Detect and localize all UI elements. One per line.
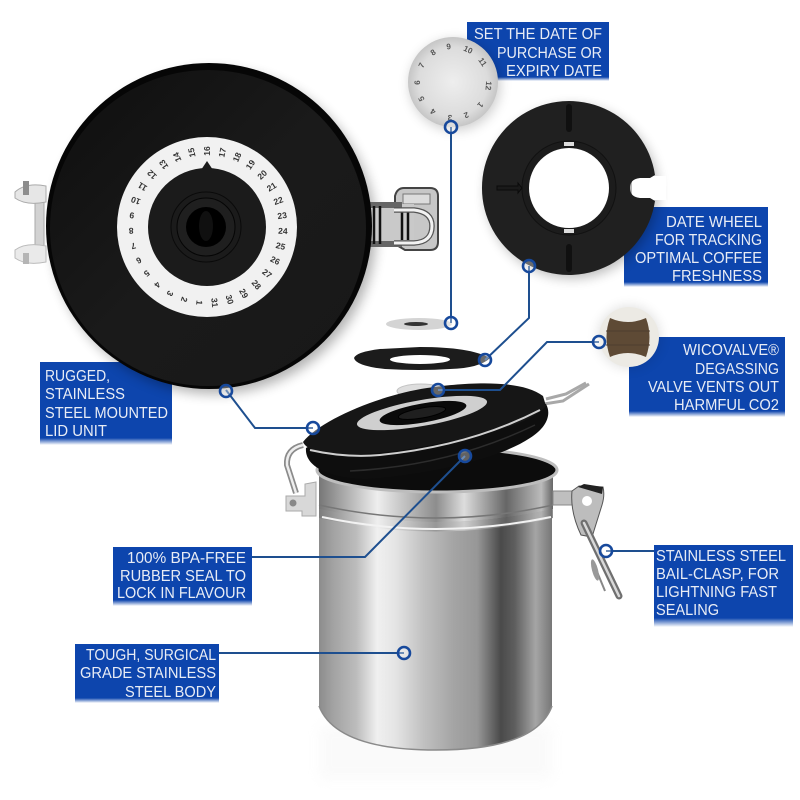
label: wicovalve: HARMFUL CO2 bbox=[674, 397, 779, 414]
exploded metal disc bbox=[386, 318, 452, 330]
metal date disc: 5 bbox=[416, 94, 427, 103]
ring dates: 13 bbox=[157, 158, 170, 171]
metal date disc: 2 bbox=[462, 110, 470, 120]
ring dates: 9 bbox=[129, 210, 135, 221]
canister reflection bbox=[319, 725, 552, 780]
ring dates: 11 bbox=[136, 180, 149, 193]
label: wicovalve: WICOVALVE® bbox=[683, 342, 779, 359]
lid top bbox=[303, 383, 546, 454]
label: set the date: SET THE DATE OF bbox=[474, 26, 602, 43]
ring dates: 27 bbox=[260, 267, 274, 280]
ring dates: 18 bbox=[230, 151, 244, 163]
label: bail clasp: LIGHTNING FAST bbox=[656, 584, 777, 601]
label: bail clasp: BAIL-CLASP, FOR bbox=[656, 566, 779, 583]
ring dates: 23 bbox=[277, 210, 288, 221]
label: rugged lid unit: STEEL MOUNTED bbox=[45, 405, 168, 422]
ring dates bbox=[128, 146, 288, 308]
white date ring bbox=[117, 137, 297, 317]
ring dates: 7 bbox=[130, 241, 137, 252]
icon: degassing valve bbox=[598, 306, 660, 368]
metal date disc: 1 bbox=[475, 100, 485, 110]
label: date wheel: OPTIMAL COFFEE bbox=[635, 250, 762, 267]
date wheel part bbox=[482, 101, 666, 275]
metal date disc: 12 bbox=[483, 81, 493, 91]
metal date disc: 8 bbox=[429, 47, 438, 58]
ring dates: 24 bbox=[278, 226, 288, 236]
label: date wheel bbox=[624, 207, 768, 287]
label: wicovalve: DEGASSING bbox=[695, 361, 779, 378]
ring dates: 1 bbox=[194, 300, 205, 306]
right lid handle bbox=[544, 383, 589, 404]
label: rubber seal: 100% BPA-FREE bbox=[127, 550, 246, 567]
label: rubber seal: LOCK IN FLAVOUR bbox=[117, 585, 246, 602]
line: date disc bbox=[450, 127, 452, 323]
rubber seal bbox=[306, 404, 548, 479]
line: lid bbox=[226, 390, 313, 428]
ring dates: 2 bbox=[179, 296, 190, 304]
label: wicovalve bbox=[629, 337, 785, 417]
tilted lid bbox=[303, 383, 589, 479]
metal date disc: 11 bbox=[476, 56, 489, 69]
ring dates: 16 bbox=[202, 146, 212, 156]
label: rubber seal bbox=[113, 547, 252, 606]
ring dates: 25 bbox=[275, 240, 287, 252]
ring dates: 12 bbox=[145, 168, 159, 182]
metal date disc: 4 bbox=[428, 106, 438, 116]
ring dates: 15 bbox=[186, 147, 198, 158]
exploded valve bbox=[397, 384, 445, 398]
label: rugged lid unit: LID UNIT bbox=[45, 423, 107, 440]
ring dates: 31 bbox=[209, 297, 220, 308]
ring dates: 26 bbox=[269, 254, 282, 267]
metal date disc bbox=[408, 37, 500, 130]
icon: right lid latch bbox=[366, 188, 438, 250]
ring dates: 17 bbox=[216, 147, 228, 158]
center dial bbox=[148, 161, 266, 286]
label: date wheel: DATE WHEEL bbox=[666, 214, 762, 231]
lid top view bbox=[46, 63, 372, 389]
ring dates: 14 bbox=[170, 151, 184, 163]
line: seal bbox=[252, 456, 465, 557]
canister body bbox=[317, 448, 557, 750]
label: rugged lid unit: STAINLESS bbox=[45, 386, 125, 403]
icon: left lid hinge bbox=[15, 181, 46, 264]
metal date disc: 7 bbox=[417, 61, 427, 69]
label: bail clasp: SEALING bbox=[656, 602, 719, 619]
exploded date wheel bbox=[354, 347, 490, 370]
label: rugged lid unit: RUGGED, bbox=[45, 368, 110, 385]
ring dates: 20 bbox=[255, 168, 269, 182]
ring dates: 4 bbox=[152, 280, 163, 290]
line: body bbox=[219, 652, 404, 654]
label: bail clasp: STAINLESS STEEL bbox=[656, 548, 786, 565]
label: set the date: PURCHASE OR bbox=[497, 45, 602, 62]
metal date disc: 10 bbox=[462, 44, 474, 56]
ring dates: 3 bbox=[165, 289, 176, 298]
right bail clasp bbox=[553, 484, 619, 596]
ring dates: 8 bbox=[128, 226, 134, 236]
lid top ring bbox=[355, 389, 489, 437]
connector lines bbox=[219, 127, 654, 653]
label: set the date bbox=[467, 22, 609, 81]
ring dates: 19 bbox=[244, 158, 257, 171]
metal date disc: 3 bbox=[447, 113, 453, 122]
line: date wheel bbox=[485, 266, 529, 360]
label: steel body: STEEL BODY bbox=[125, 684, 216, 701]
ring dates: 30 bbox=[224, 294, 236, 306]
left canister hinge bbox=[286, 445, 316, 516]
metal date disc: 9 bbox=[446, 42, 452, 52]
metal date disc: 6 bbox=[413, 80, 422, 85]
label: date wheel: FOR TRACKING bbox=[655, 232, 762, 249]
line: clasp bbox=[606, 550, 654, 552]
label: steel body: TOUGH, SURGICAL bbox=[86, 647, 216, 664]
lid shadow bbox=[52, 70, 376, 394]
label: rubber seal: RUBBER SEAL TO bbox=[120, 568, 246, 585]
wheel shadow bbox=[486, 106, 658, 278]
ring dates: 10 bbox=[129, 194, 142, 207]
ring dates: 6 bbox=[134, 255, 143, 266]
label: rugged lid unit bbox=[40, 362, 172, 445]
ring dates: 21 bbox=[265, 180, 278, 194]
label: wicovalve: VALVE VENTS OUT bbox=[648, 379, 779, 396]
marker dots bbox=[220, 121, 612, 659]
ring dates: 29 bbox=[237, 287, 251, 300]
label: date wheel: FRESHNESS bbox=[672, 268, 762, 285]
line: valve bbox=[438, 342, 599, 390]
label: bail clasp bbox=[654, 545, 793, 627]
label: steel body bbox=[75, 644, 219, 703]
label: steel body: GRADE STAINLESS bbox=[80, 665, 216, 682]
ring dates: 28 bbox=[250, 278, 264, 292]
ring dates: 5 bbox=[142, 268, 152, 279]
ring dates: 22 bbox=[272, 194, 285, 207]
label: set the date: EXPIRY DATE bbox=[506, 63, 602, 80]
